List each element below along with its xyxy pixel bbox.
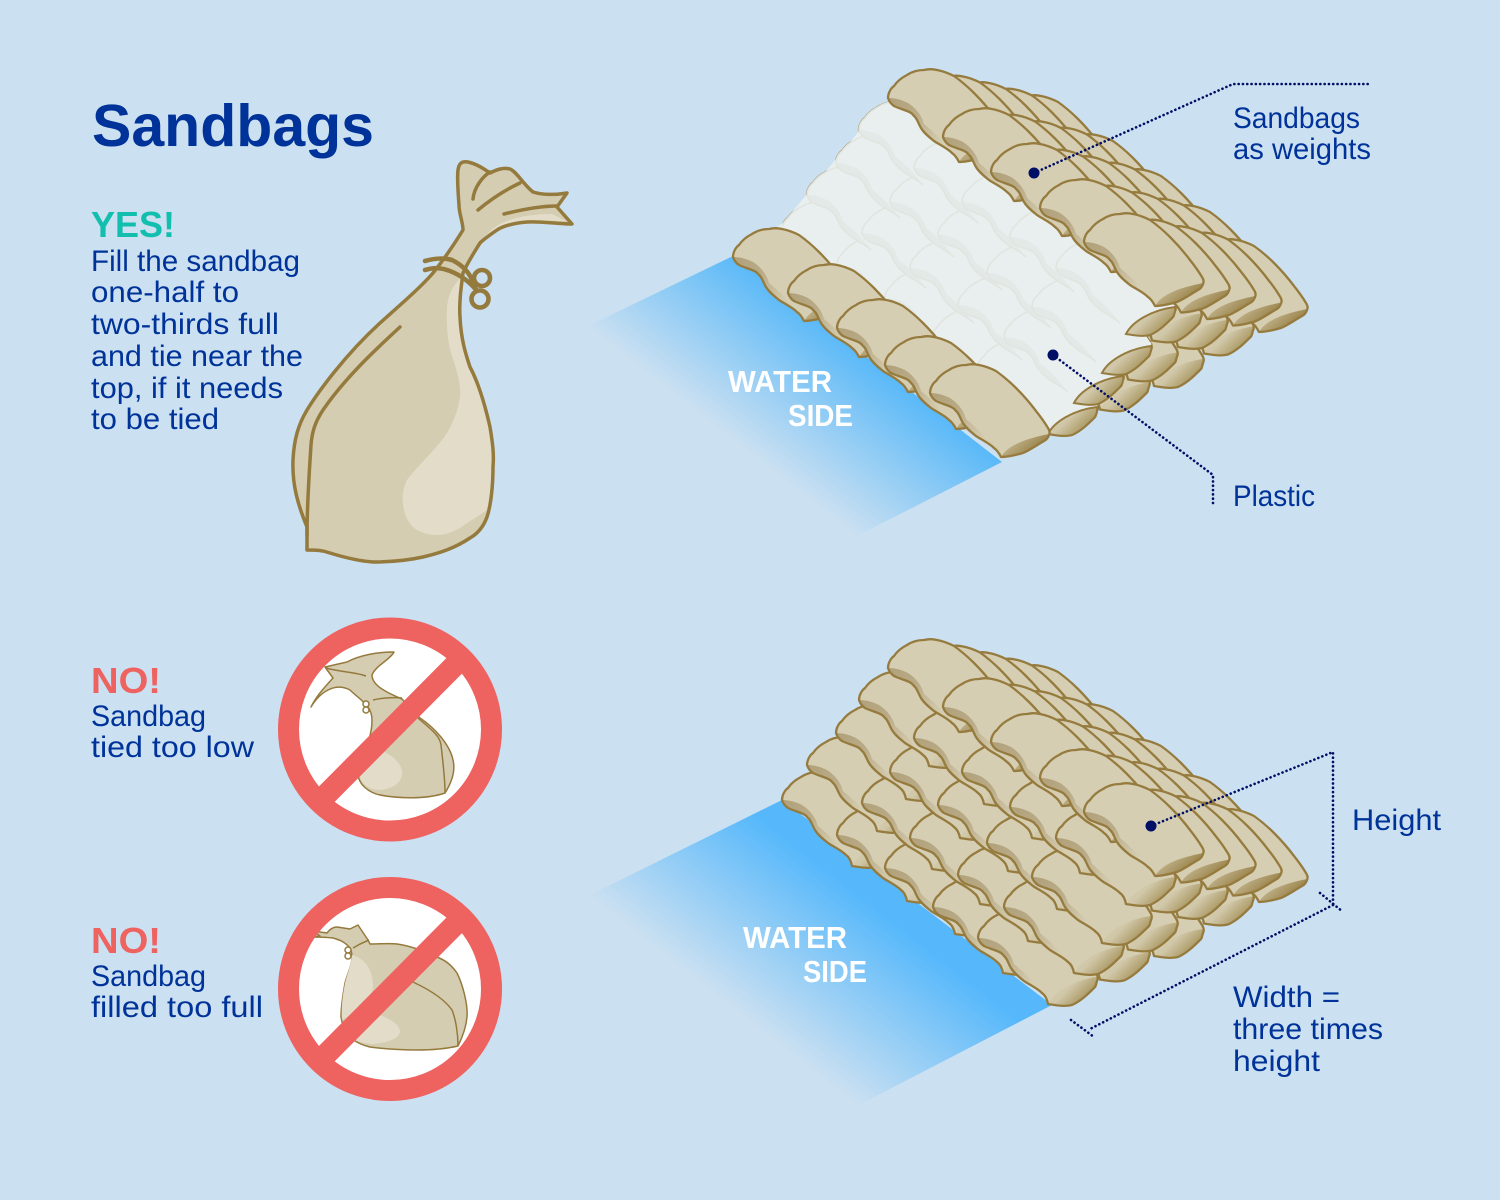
body: filled too full bbox=[91, 960, 263, 1024]
callout: sandbags as weights: as weights bbox=[1233, 133, 1371, 166]
label: water side: SIDE bbox=[788, 398, 853, 433]
body: fill instructions: to be tied bbox=[91, 403, 219, 436]
callout: height bbox=[1146, 752, 1442, 912]
body: filled too full: filled too full bbox=[91, 991, 263, 1024]
callout: width: height bbox=[1233, 1045, 1321, 1078]
body: fill instructions bbox=[91, 245, 303, 436]
icon: prohibited bag filled too full bbox=[288, 888, 492, 1090]
lower sandbag layers bbox=[782, 101, 1254, 436]
callout: sandbags as weights: Sandbags bbox=[1233, 102, 1360, 135]
body: fill instructions: Fill the sandbag bbox=[91, 245, 300, 278]
label: water side bbox=[728, 364, 853, 433]
body: tied too low bbox=[91, 700, 254, 764]
heading: no: NO! bbox=[91, 660, 161, 701]
plastic sheet bbox=[733, 130, 1176, 432]
text block: filled too full bbox=[91, 920, 263, 1024]
callout: width bbox=[1071, 905, 1383, 1078]
icon: correctly filled sandbag bbox=[293, 162, 572, 562]
body: fill instructions: and tie near the bbox=[91, 340, 303, 373]
water area bbox=[580, 800, 1052, 1107]
stacked sandbags bbox=[782, 639, 1308, 1006]
diagram: sandbags weighting plastic sheet bbox=[580, 69, 1371, 537]
diagram: full sandbag dike bbox=[580, 639, 1442, 1107]
callout: sandbags as weights bbox=[1028, 84, 1371, 178]
label: water side bbox=[743, 920, 867, 989]
top row of sandbags as weights bbox=[888, 69, 1308, 332]
callout: width: Width = bbox=[1233, 981, 1340, 1014]
body: tied too low: tied too low bbox=[91, 731, 254, 764]
text block: tied too low bbox=[91, 660, 254, 764]
front row of sandbags on water side bbox=[733, 228, 1050, 457]
label: water side: WATER bbox=[728, 364, 832, 399]
label: water side: WATER bbox=[743, 920, 847, 955]
heading: yes: YES! bbox=[91, 204, 175, 245]
body: fill instructions: two-thirds full bbox=[91, 308, 279, 341]
callout: plastic bbox=[1048, 350, 1315, 513]
water area bbox=[580, 255, 1002, 537]
title: Sandbags bbox=[92, 93, 374, 159]
label: water side: SIDE bbox=[803, 954, 867, 989]
text block: yes advice bbox=[91, 204, 303, 436]
icon: prohibited bag tied too low bbox=[288, 628, 492, 831]
callout: plastic: Plastic bbox=[1233, 480, 1315, 513]
callout: height: Height bbox=[1352, 804, 1442, 837]
plastic-covered bags bbox=[782, 101, 1176, 436]
body: fill instructions: top, if it needs bbox=[91, 372, 283, 405]
body: filled too full: Sandbag bbox=[91, 960, 206, 993]
heading: no: NO! bbox=[91, 920, 161, 961]
callout: width: three times bbox=[1233, 1013, 1383, 1046]
body: fill instructions: one-half to bbox=[91, 276, 239, 309]
body: tied too low: Sandbag bbox=[91, 700, 206, 733]
